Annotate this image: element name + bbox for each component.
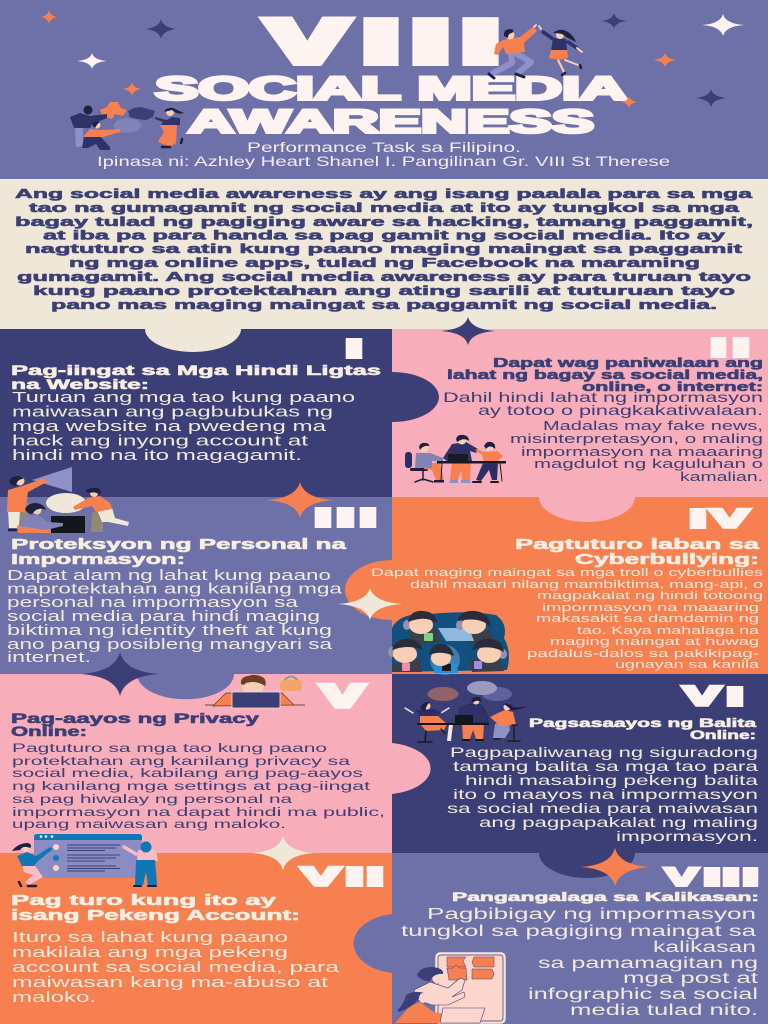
blob: pink top [539,497,635,522]
panel: I hindi ligtas na website [0,329,439,497]
numeral IV: I [682,502,714,536]
title numeral: V [268,8,346,75]
numeral II: I [704,331,734,365]
body VI: sa social media para maiwasan [447,800,758,816]
title: social media awareness: SOCIAL MEDIA [155,70,627,106]
blob: navy side bump [392,372,439,422]
numeral III: I [307,501,339,535]
heading II: Dapat wag paniwalaan ang [493,356,763,370]
body VIII: media tulad nito. [570,1002,758,1019]
body II: impormasyon na maaaring [521,444,763,459]
numeral III: I [352,501,384,535]
numeral VII: I [359,860,391,894]
subtitle: Ipinasa ni: Azhley Heart Shanel I. Pangilinan Gr. VIII St Therese [97,153,670,169]
body IV: magpakalat ng hindi totoong [537,590,763,602]
heading IV [515,537,761,568]
panel: VII pekeng account [0,834,392,1024]
numeral II [704,331,757,365]
heading III: Proteksyon ng Personal na [11,537,348,553]
body VII: account sa social media, para [12,959,340,976]
icon: boy with laptop [205,675,305,708]
numeral III: I [328,501,362,535]
body III: social media para hindi maging [7,609,320,625]
heading V: Pag-aayos ng Privacy [11,711,260,726]
numeral VIII: I [736,862,766,894]
title numeral: I [396,3,466,82]
numeral II: I [725,331,757,365]
blob: orange side bump [345,560,392,620]
icon: people with shapes [7,467,129,533]
blob: cream top [145,329,241,352]
star: orange [581,848,649,886]
body VII: maiwasan kang ma-abuso at [12,974,329,991]
body VII: maloko. [12,989,96,1006]
icon: high five people [489,25,582,78]
body IV: maging maingat at huwag [550,636,759,648]
body II: magdulot ng kaguluhan o [534,456,763,471]
body III: biktima ng identity theft at kung [7,623,332,639]
body II: Madalas may fake news, [543,418,763,433]
body II: misinterpretasyon, o maling [510,431,763,446]
body IV: ugnayan sa kanila [615,659,760,671]
star: over title [620,96,638,108]
icon: people and web window [12,834,158,886]
body II: ay totoo o pinagkakatiwalaan. [478,402,763,418]
numeral VIII: I [715,862,747,894]
body III: ano pang posibleng mangyari sa [7,637,333,653]
numeral VII: I [338,860,372,894]
heading IV: Cyberbullying: [575,552,759,568]
body IV: impormasyon na maaaring [542,602,759,614]
panel: II dapat wag paniwalaan [392,317,768,497]
numeral IV [682,502,748,536]
heading I [11,362,381,392]
body V: ng kanilang mga settings at pag-iingat [12,779,371,793]
blob: periwinkle top [137,674,234,699]
numeral IV: V [711,505,748,533]
body V: upang maiwasan ang maloko. [12,817,286,831]
body VI: tamang balita sa mga tao para [453,758,758,774]
numeral VII [302,860,391,894]
body VIII [401,906,759,1019]
body VII [12,929,340,1006]
body III: Dapat alam ng lahat kung paano [7,568,331,584]
intro paragraph: tao na gumagamit ng social media at ito ay tungkol sa mga [29,200,740,215]
panel: VI pagsasaayos ng balita [392,674,768,853]
numeral VIII: V [665,864,699,892]
intro paragraph: gumagamit. Ang social media awareness ay para turuan tayo [17,269,751,284]
title numeral [268,3,516,82]
icon: people with phone puzzle [395,953,505,1023]
body IV: makasakit sa damdamin ng [536,613,759,625]
blob: periwinkle side bump [354,914,392,973]
numeral VII: V [302,863,340,891]
intro paragraph: at iba pa para handa sa pag gamit ng social media. Ito ay [43,228,726,242]
body VI: ito o maayos na impormasyon [453,786,758,802]
body IV: dahil maaari nilang mambiktima, mang-api, o [410,579,763,591]
body VII: Ituro sa lahat kung paano [12,929,288,946]
heading VI: Pagsasaayos ng Balita [529,716,757,730]
panel: IV cyberbullying [338,497,768,675]
numeral III [307,501,384,535]
panel: VIII pangangalaga sa kalikasan [354,848,768,1024]
heading II: online, o internet: [582,380,763,394]
body IV: padalus-dalos sa pakikipag- [527,648,760,660]
title numeral: I [446,3,516,82]
subtitle [97,139,670,169]
intro paragraph [15,186,753,312]
star: navy [441,317,495,345]
body V: social media, kabilang ang pag-aayos [12,766,363,780]
body III: personal na impormasyon sa [7,595,299,611]
body VIII: sa pamamagitan ng [538,955,758,972]
heading VIII: Pangangalaga sa Kalikasan: [452,890,759,904]
body VIII: infographic sa social [528,986,758,1003]
heading VII: Pag turo kung ito ay [11,892,277,909]
numeral V: V [322,679,364,714]
body III: maprotektahan ang kanilang mga [7,582,343,598]
icon: puzzle people [70,102,184,150]
subtitle: Performance Task sa Filipino. [247,139,521,155]
intro paragraph: bagay tulad ng pagiging aware sa hacking, tamang paggamit, [15,214,753,229]
body V: sa pag hiwalay ng personal na [12,792,292,806]
heading VI [529,716,757,742]
body II: Dahil hindi lahat ng impormasyon [443,389,763,405]
title numeral: I [347,3,415,82]
intro paragraph: nagtuturo sa atin kung paano maging maingat sa paggamit [25,241,743,256]
body I [12,389,355,464]
body VIII: kalikasan [653,939,756,956]
star: navy [81,652,159,696]
decorative stars [40,10,744,107]
body IV: tao. Kaya mahalaga na [577,625,760,637]
intro paragraph: pano mas maging maingat sa paggamit ng social media. [51,297,717,312]
panel: III proteksyon ng personal na impormasyon [0,482,392,674]
icon: worried group with phones [388,611,509,675]
numeral VI: V [684,681,721,711]
heading I: Pag-iingat sa Mga Hindi Ligtas [11,362,381,378]
heading IV: Pagtuturo laban sa [515,537,761,553]
body I: hindi mo na ito magagamit. [12,447,302,464]
blob: pink side bump [392,743,431,794]
body IV [371,567,764,671]
blob: navy top [539,853,635,878]
body I: Turuan ang mga tao kung paano [12,389,355,406]
numeral VIII [665,862,766,894]
numeral I: I [338,332,370,366]
body VI: ang pagpapakalat ng maling [479,814,758,830]
body VI: Pagpapaliwanag ng siguradong [450,744,758,760]
title: social media awareness [155,70,627,140]
header [0,0,768,179]
body V: protektahan ang kanilang privacy sa [12,754,350,768]
body VII: makilala ang mga pekeng [12,944,288,961]
body VI: impormasyon. [616,828,758,844]
heading II: lahat ng bagay sa social media, [447,368,763,382]
body III [7,568,343,666]
heading VII [11,892,300,924]
numeral VIII: I [696,862,728,894]
body V: impormasyon na dapat hindi ma public, [12,805,385,819]
intro paragraph: ng mga online apps, tulad ng Facebook na maraming [69,255,700,270]
heading V: Online: [11,724,87,739]
numeral VI: I [719,680,751,714]
body VIII: mga post at [623,970,759,987]
star: orange [267,482,333,518]
body VI [447,744,758,844]
body II [443,389,763,484]
icon: office team [405,435,506,483]
body IV: Dapat maging maingat sa mga troll o cyberbullies [371,567,764,579]
star: cream [252,836,314,870]
intro paragraph: Ang social media awareness ay ang isang paalala para sa mga [15,186,753,201]
heading VI: Online: [690,728,756,742]
body III: internet. [7,650,91,666]
body V [12,741,385,831]
title: social media awareness: AWARENESS [188,104,594,140]
body VI: hindi masabing pekeng balita [465,772,758,788]
body I: maiwasan ang pagbubukas ng [12,404,333,420]
body I: mga website na pwedeng ma [12,418,327,435]
heading VII: isang Pekeng Account: [11,907,300,924]
heading I: na Website: [11,376,149,392]
body VIII: tungkol sa pagiging maingat sa [401,923,757,940]
numeral VI [684,680,751,714]
body I: hack ang inyong account at [12,432,309,450]
panel: V pag-aayos ng privacy [0,652,392,853]
body II: kamalian. [680,469,763,484]
intro paragraph: kung paano protektahan ang ating sarili at tuturuan tayo [33,283,735,298]
icon: team talking at table [405,681,527,742]
body V: Pagtuturo sa mga tao kung paano [12,741,327,755]
heading V [11,711,260,739]
star: cream [338,588,402,620]
heading II [447,356,763,394]
heading III [11,537,348,568]
heading III: Impormasyon: [11,552,185,568]
body VIII: Pagbibigay ng impormasyon [427,906,756,923]
